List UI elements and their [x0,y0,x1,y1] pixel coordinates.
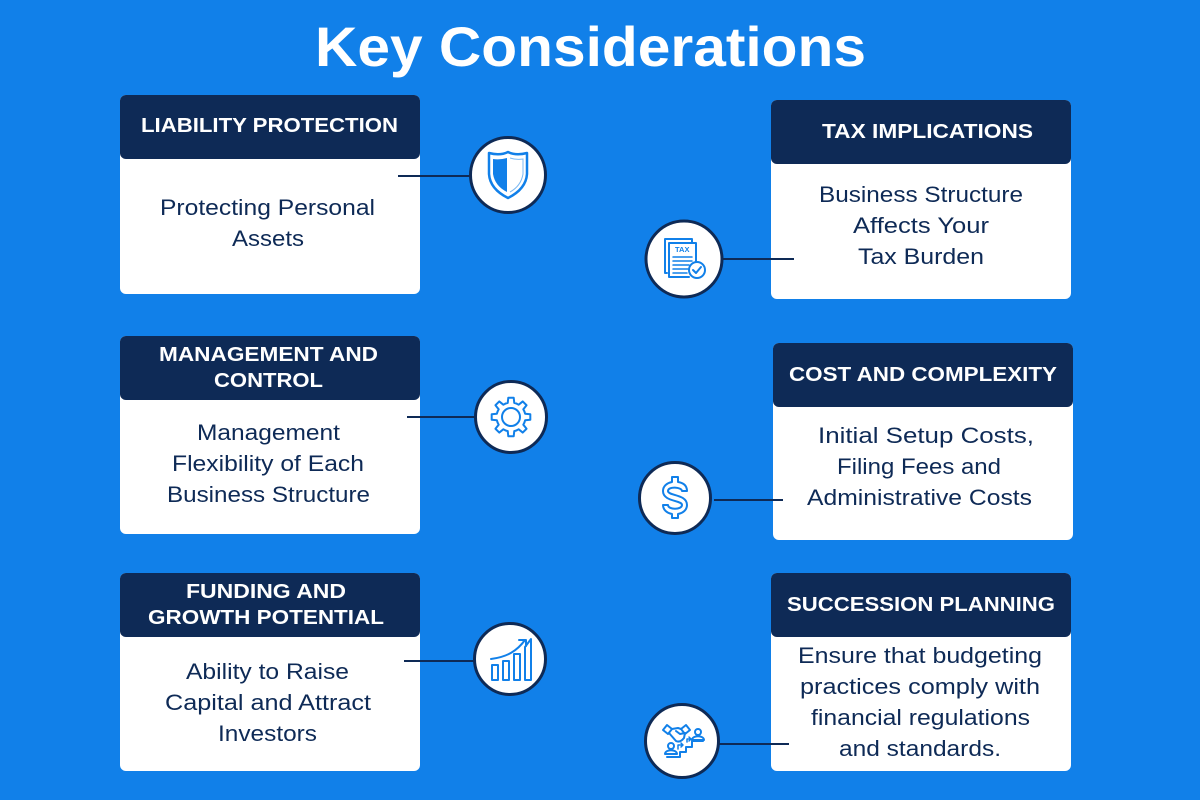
icon: handshake and stairs [646,704,718,778]
text: succession description: Ensure that budgeting [798,643,1042,668]
icon: growth chart [474,624,546,694]
panel header: liability protection [120,95,420,159]
text: management description: Flexibility of Each [172,451,364,476]
text: tax implications description [819,182,1023,269]
text: funding description: Investors [218,721,317,746]
text: succession description: financial regulations [811,705,1030,730]
text: liability protection description: Protecting Personal [160,195,375,220]
panel: funding and growth potential [120,573,420,771]
panel header: tax implications [771,100,1071,164]
panel header: tax implications: TAX IMPLICATIONS [822,120,1033,143]
text: management description: Management [197,420,340,445]
text: funding description: Ability to Raise [186,659,349,684]
connector: cost [714,499,783,501]
text: succession description [798,643,1042,761]
text: tax implications description: Business Structure [819,182,1023,207]
panel header: management and control: MANAGEMENT AND [159,343,378,366]
panel header: cost and complexity [773,343,1073,407]
text: management description: Business Structure [167,482,370,507]
icon: tax document [646,221,722,297]
text: succession description: and standards. [839,736,1001,761]
text: tax implications description: Tax Burden [858,244,984,269]
panel: succession planning [771,573,1071,771]
text: management description [167,420,370,507]
panel header: liability protection: LIABILITY PROTECTION [141,114,398,137]
panel header: funding and growth potential: GROWTH POTENTIAL [148,606,384,629]
connector: funding [404,660,475,662]
text: cost description: Filing Fees and [837,454,1001,479]
panel header: management and control: CONTROL [214,369,323,392]
text: cost description: Administrative Costs [807,485,1032,510]
panel header: management and control [120,336,420,400]
connector: tax [722,258,794,260]
icon: shield [470,138,546,212]
panel header: funding and growth potential [120,573,420,637]
text: succession description: practices comply with [800,674,1040,699]
panel: liability protection [120,95,420,294]
text: tax implications description: Affects Your [853,213,989,238]
panel header: succession planning [771,573,1071,637]
connector: succession [719,743,789,745]
panel: cost and complexity [773,343,1073,540]
text: cost description: Initial Setup Costs, [818,423,1034,448]
icon: gear [476,382,546,452]
text: liability protection description [160,195,375,251]
panel header: cost and complexity: COST AND COMPLEXITY [789,363,1057,386]
icon: dollar [640,462,710,534]
text: funding description [165,659,371,746]
panel: tax implications [771,100,1071,299]
connector: liability [398,175,470,177]
text: funding description: Capital and Attract [165,690,371,715]
connector: management [407,416,476,418]
text: liability protection description: Assets [232,226,304,251]
panel: management and control [120,336,420,534]
panel header: funding and growth potential: FUNDING AND [186,580,346,603]
icon: tax document: TAX [675,245,689,254]
panel header: succession planning: SUCCESSION PLANNING [787,593,1055,616]
title: Key Considerations [315,15,866,78]
text: cost description [807,423,1034,510]
